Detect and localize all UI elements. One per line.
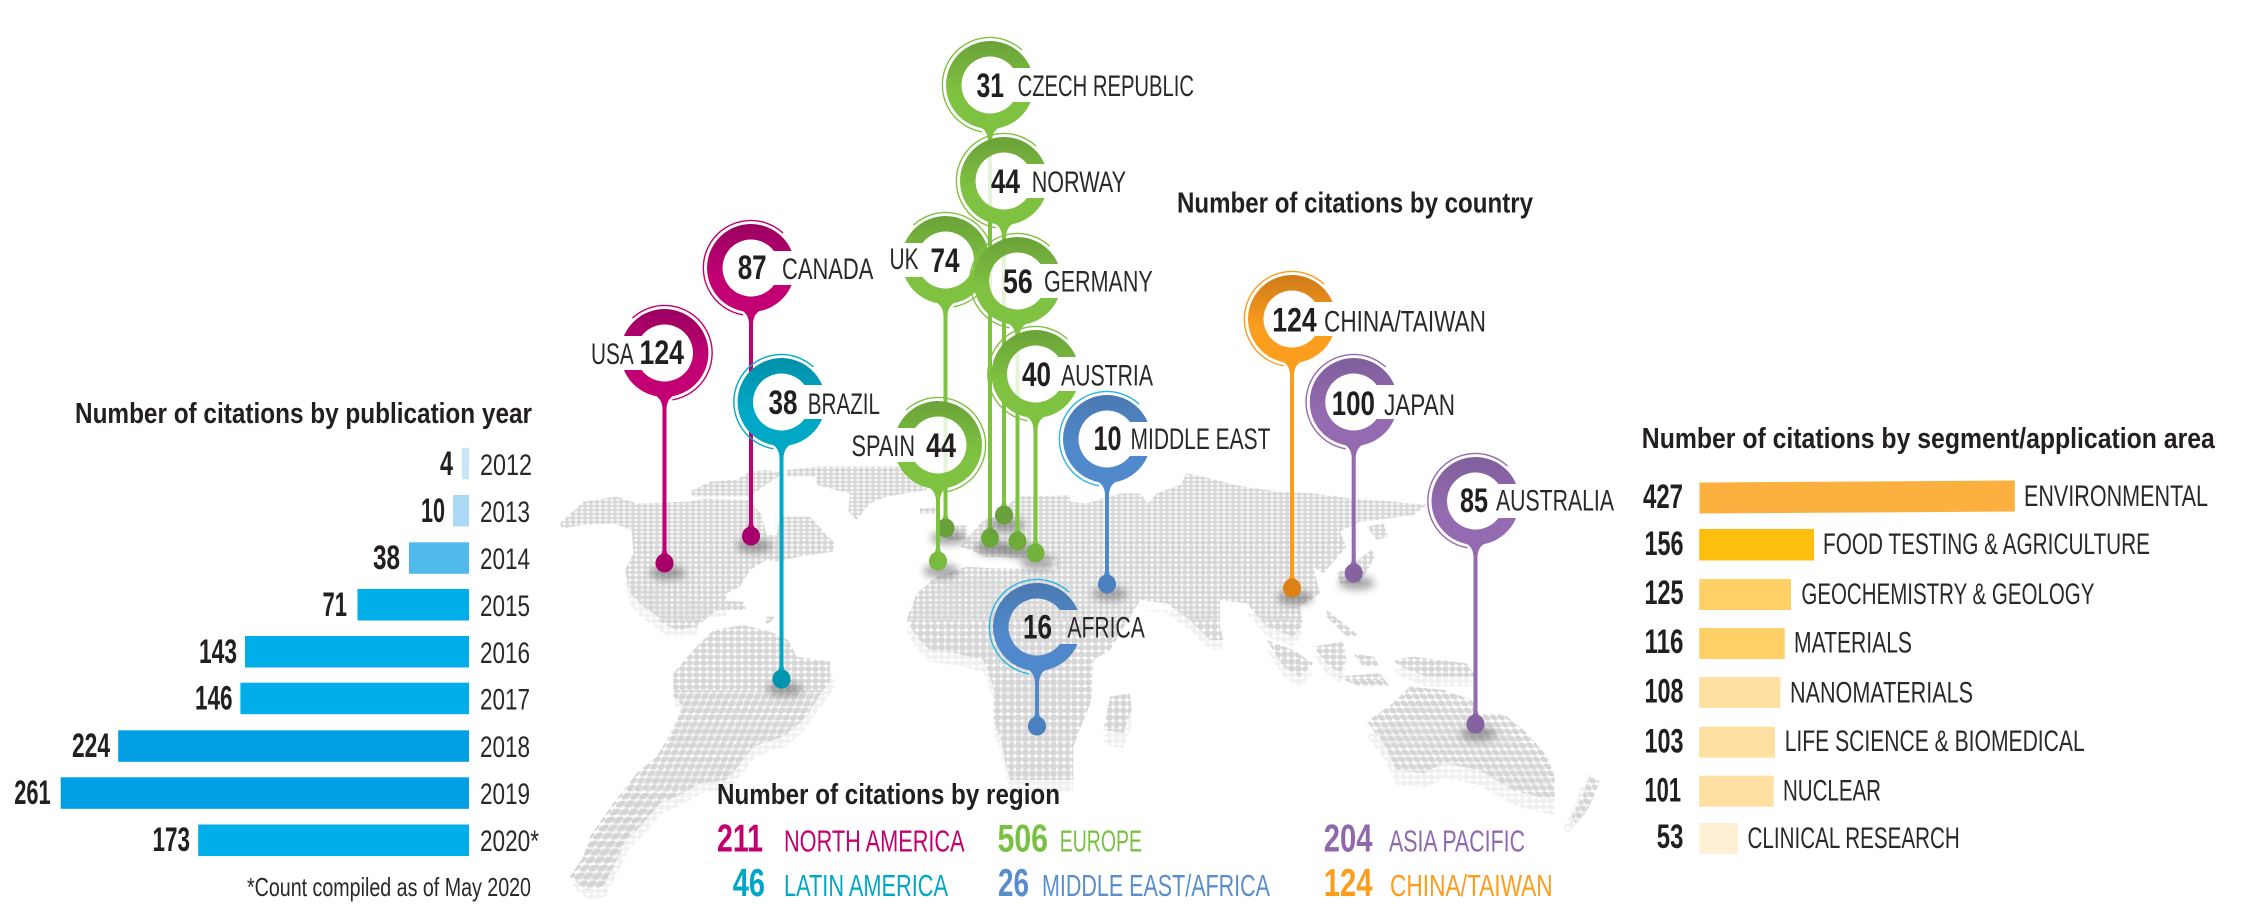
row nuclear: NUCLEAR: [1783, 775, 1881, 808]
legend: Asia Pacific: 204: [1324, 818, 1373, 861]
pin: Australia: 85: [1460, 482, 1488, 520]
row 2020: 173: [152, 821, 190, 859]
legend: Latin America: LATIN AMERICA: [784, 868, 948, 903]
row materials: MATERIALS: [1794, 627, 1912, 660]
pin: Japan: 100: [1332, 385, 1375, 423]
legend: Middle East/Africa: 26: [998, 862, 1029, 905]
pin: Germany: GERMANY: [1044, 266, 1153, 298]
row 2014: 38: [373, 539, 400, 577]
legend: Middle East/Africa: [998, 862, 1270, 905]
pin: Australia: AUSTRALIA: [1496, 485, 1614, 518]
row clinical research: 53: [1657, 818, 1683, 856]
row 2020: [152, 821, 539, 859]
pin: Czech Republic: CZECH REPUBLIC: [1018, 70, 1194, 103]
row environmental: [1643, 478, 2208, 516]
legend: Latin America: [733, 862, 948, 905]
row geochemistry: [1644, 574, 2094, 612]
row 2018: [72, 727, 530, 765]
legend: Latin America: 46: [733, 862, 765, 905]
pin: USA: [591, 305, 712, 580]
row 2017: [195, 680, 530, 718]
pin: Norway: 44: [991, 163, 1020, 201]
pin: Middle East: [1059, 391, 1270, 601]
region legend: [717, 818, 1553, 905]
pin: Brazil: BRAZIL: [808, 388, 880, 421]
row 2016: 143: [199, 633, 237, 671]
row food testing: [1644, 525, 2150, 563]
row 2019: [14, 774, 530, 812]
pin: Middle East: MIDDLE EAST: [1130, 423, 1270, 456]
row 2013: [421, 492, 530, 530]
legend: North America: 211: [717, 818, 763, 861]
pin: Canada: 87: [738, 249, 767, 287]
legend: China/Taiwan: CHINA/TAIWAN: [1390, 868, 1553, 903]
row geochemistry: GEOCHEMISTRY & GEOLOGY: [1801, 578, 2094, 611]
legend: Europe: 506: [998, 818, 1048, 861]
legend: North America: NORTH AMERICA: [784, 824, 965, 859]
pin: Brazil: 38: [768, 384, 798, 422]
pin: China/Taiwan: CHINA/TAIWAN: [1324, 306, 1486, 338]
row life science: 103: [1644, 723, 1684, 761]
pin: Austria: 40: [1022, 356, 1051, 394]
legend: Europe: [998, 818, 1142, 861]
heading: by publication year: Number of citations by publication year: [75, 398, 532, 430]
pin: Czech Republic: 31: [976, 67, 1004, 105]
row 2015: 2015: [480, 590, 530, 623]
row 2019: 2019: [480, 778, 530, 811]
pin: USA: 124: [640, 334, 684, 372]
row 2013: 10: [421, 492, 445, 530]
row 2015: [322, 586, 530, 624]
pin: Czech Republic: [942, 37, 1194, 555]
pin: Spain: SPAIN: [852, 430, 915, 463]
row 2018: 224: [72, 727, 110, 765]
row materials: [1644, 623, 1912, 661]
heading: by country: Number of citations by country: [1177, 188, 1533, 220]
row 2019: 261: [14, 774, 51, 812]
pin: Brazil: [734, 354, 880, 696]
dotted world map: [560, 466, 1600, 900]
row 2015: 71: [322, 586, 347, 624]
legend: China/Taiwan: [1324, 862, 1553, 905]
pin: USA: USA: [591, 338, 634, 371]
pin: Japan: [1306, 354, 1455, 590]
row 2012: [440, 445, 532, 483]
pin: China/Taiwan: 124: [1272, 302, 1317, 340]
pin: Austria: AUSTRIA: [1061, 360, 1153, 392]
row 2017: 146: [195, 680, 232, 718]
row geochemistry: 125: [1644, 574, 1684, 612]
row 2016: 2016: [480, 637, 530, 670]
heading: by region: Number of citations by region: [717, 779, 1060, 811]
row food testing: 156: [1644, 525, 1684, 563]
row life science: [1644, 723, 2085, 761]
row nanomaterials: [1644, 673, 1973, 711]
bar chart: citations by publication year: [14, 445, 539, 859]
row materials: 116: [1644, 623, 1684, 661]
legend: Asia Pacific: ASIA PACIFIC: [1389, 824, 1525, 859]
row 2020: 2020*: [480, 825, 539, 858]
row environmental: 427: [1643, 478, 1683, 516]
pin: Norway: NORWAY: [1032, 166, 1126, 199]
pin: Germany: 56: [1003, 263, 1033, 301]
pin: Austria: [988, 326, 1153, 570]
pin: Norway: [956, 133, 1126, 532]
row 2016: [199, 633, 530, 671]
row 2017: 2017: [480, 684, 530, 716]
pin: Canada: [703, 220, 873, 553]
pin: Australia: [1428, 453, 1614, 741]
pin: Japan: JAPAN: [1384, 389, 1455, 422]
row nanomaterials: NANOMATERIALS: [1790, 677, 1973, 710]
legend: China/Taiwan: 124: [1324, 862, 1373, 905]
pin: Canada: CANADA: [782, 253, 873, 286]
row life science: LIFE SCIENCE & BIOMEDICAL: [1785, 725, 2085, 758]
legend: Middle East/Africa: MIDDLE EAST/AFRICA: [1042, 868, 1270, 903]
pin: Germany: [970, 233, 1153, 558]
pin: Spain: [852, 397, 986, 578]
pin: UK: 74: [930, 242, 960, 280]
row clinical research: [1657, 818, 1960, 856]
bar chart: citations by segment: [1643, 478, 2208, 856]
footnote: *Count compiled as of May 2020: [247, 872, 531, 902]
pin: China/Taiwan: [1244, 271, 1486, 605]
pin: Africa: [989, 579, 1145, 736]
pin: Spain: 44: [926, 427, 956, 465]
pin: UK: [890, 212, 993, 545]
row 2013: 2013: [480, 496, 530, 529]
pin: UK: UK: [890, 243, 918, 276]
pin: Middle East: 10: [1094, 420, 1122, 458]
legend: Asia Pacific: [1324, 818, 1525, 861]
row 2018: 2018: [480, 731, 530, 764]
row 2012: 4: [440, 445, 453, 483]
pin: Africa: AFRICA: [1067, 612, 1145, 644]
row clinical research: CLINICAL RESEARCH: [1748, 822, 1960, 855]
pin: Africa: 16: [1023, 608, 1052, 646]
legend: North America: [717, 818, 965, 861]
row nuclear: 101: [1644, 772, 1681, 810]
row 2014: [373, 539, 530, 577]
legend: Europe: EUROPE: [1060, 824, 1142, 859]
row nuclear: [1644, 772, 1881, 810]
row nanomaterials: 108: [1644, 673, 1684, 711]
row 2014: 2014: [480, 543, 530, 576]
row 2012: 2012: [480, 449, 532, 482]
